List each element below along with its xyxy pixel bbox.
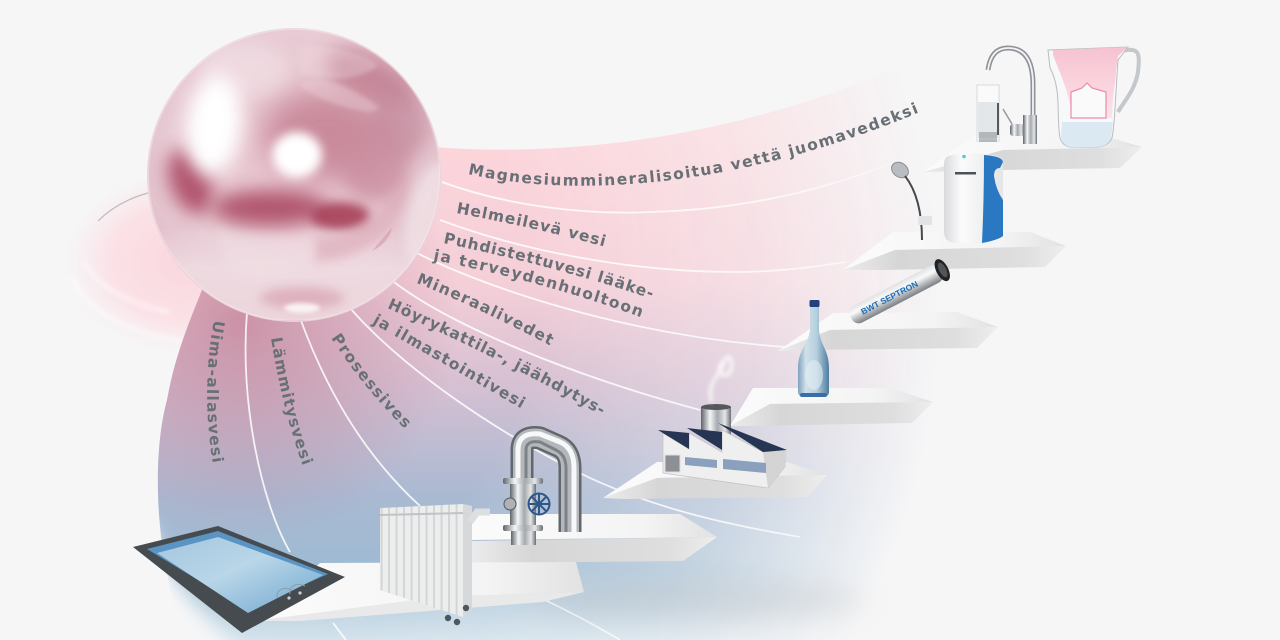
icon: steel pipe with valve <box>503 434 574 545</box>
icon: glass water bottle <box>798 300 829 397</box>
lower pearl glaze <box>164 240 411 320</box>
shelf 4 <box>730 388 933 426</box>
globe <box>147 28 465 322</box>
shelf 3 <box>778 312 998 351</box>
label: ja ilmastointivesi: ja ilmastointivesi <box>370 314 526 408</box>
shelf 6 <box>471 514 717 563</box>
dividing lines of the fan <box>244 174 860 640</box>
icon: pink water filter jug <box>1048 47 1139 147</box>
icon: BWT Septron UV tube: BWT SEPTRON <box>859 279 920 317</box>
icon: BWT Septron UV tube <box>845 257 953 328</box>
floor shadow <box>535 578 865 622</box>
steam <box>710 357 732 402</box>
shelf 7 <box>255 562 584 621</box>
soft fade of the fan bottom-left corner <box>120 525 250 640</box>
globe highlights <box>181 42 322 178</box>
label: Magnesiummineralisoitua vettä juomavedeksi: Magnesiummineralisoitua vettä juomavedeksi <box>469 102 918 186</box>
icon: swimming pool <box>133 526 345 633</box>
icon: reverse osmosis unit <box>944 153 1003 243</box>
icon: factory with solar roof <box>658 357 787 488</box>
globe shading <box>159 36 430 230</box>
label: ja terveydenhuoltoon: ja terveydenhuoltoon <box>432 248 642 317</box>
colour fan: water applications from pink to blue <box>158 96 889 640</box>
label: Uima-allasvesi: Uima-allasvesi <box>207 322 225 462</box>
label: Helmeilevä vesi: Helmeilevä vesi <box>457 202 606 246</box>
shelf 1: top <box>923 136 1142 172</box>
icon: faucet and glass <box>977 48 1037 144</box>
label: Höyrykattila-, jäähdytys-: Höyrykattila-, jäähdytys- <box>388 298 604 412</box>
label: Lämmitysvesi: Lämmitysvesi <box>271 338 314 464</box>
icon: radiator <box>380 504 490 625</box>
label: Mineraalivedet: Mineraalivedet <box>417 272 554 346</box>
icon: shower head <box>889 159 932 240</box>
shelf 5 <box>603 462 827 499</box>
shelf 2 <box>843 232 1066 270</box>
swirl ripples under the globe <box>35 170 285 354</box>
label: Puhdistettuvesi lääke-: Puhdistettuvesi lääke- <box>444 232 652 296</box>
continents <box>225 49 406 264</box>
